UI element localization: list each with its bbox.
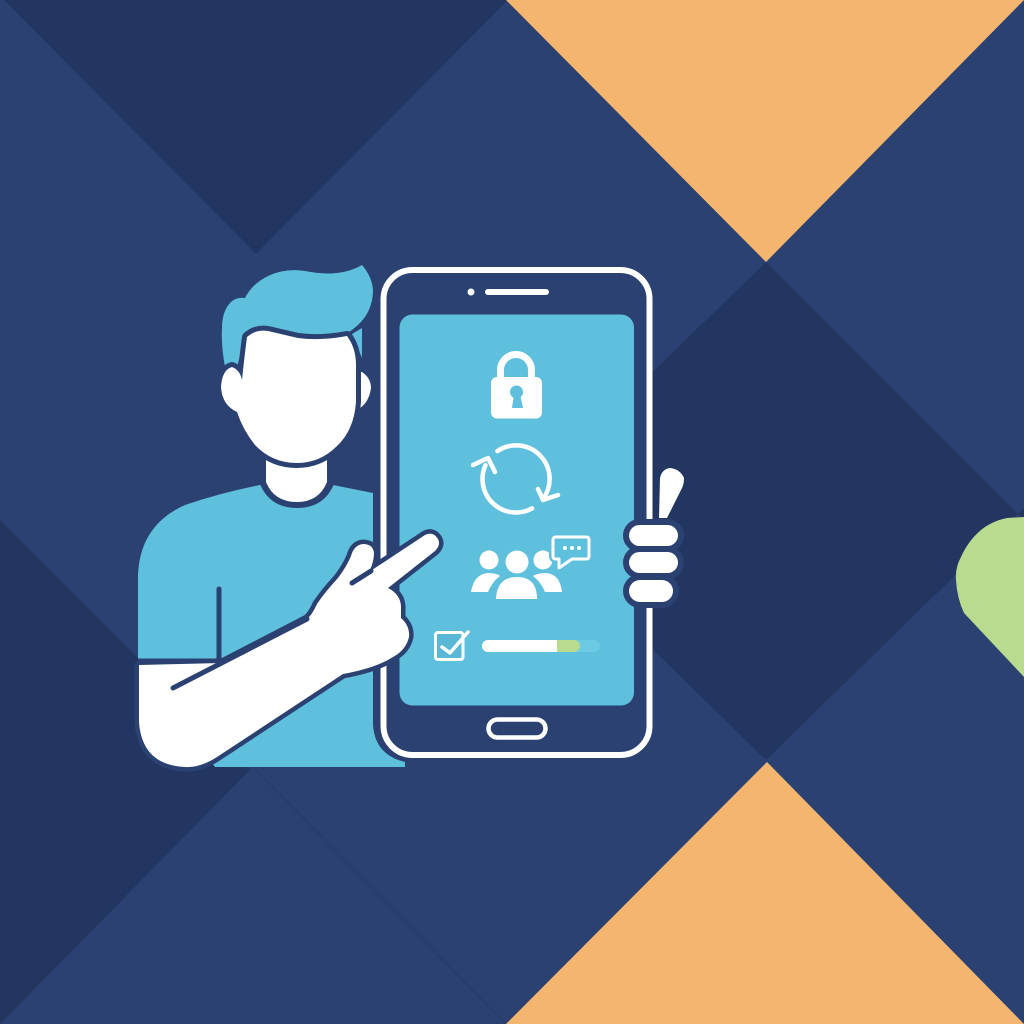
icon: sync arrows — [473, 445, 558, 513]
finger crease line — [352, 571, 371, 583]
shirt — [138, 485, 405, 767]
shirt sleeve seam — [216, 589, 222, 660]
arm crease line — [173, 619, 307, 688]
icon: group of people with speech bubble — [471, 537, 589, 599]
home button — [488, 720, 546, 738]
sleeve hem — [138, 658, 224, 664]
progress bar — [482, 640, 600, 652]
phone speaker — [485, 289, 549, 295]
face — [221, 331, 356, 463]
icon: checkbox — [436, 632, 468, 660]
neck and collar — [260, 455, 334, 508]
smartphone — [384, 270, 650, 755]
hair — [222, 265, 373, 368]
holding hand with thumb — [629, 468, 684, 602]
pointing arm and hand — [139, 534, 439, 767]
person — [138, 265, 405, 767]
right ear — [354, 372, 371, 408]
phone camera — [468, 288, 474, 296]
icon: padlock — [491, 354, 542, 418]
phone screen — [400, 314, 634, 706]
